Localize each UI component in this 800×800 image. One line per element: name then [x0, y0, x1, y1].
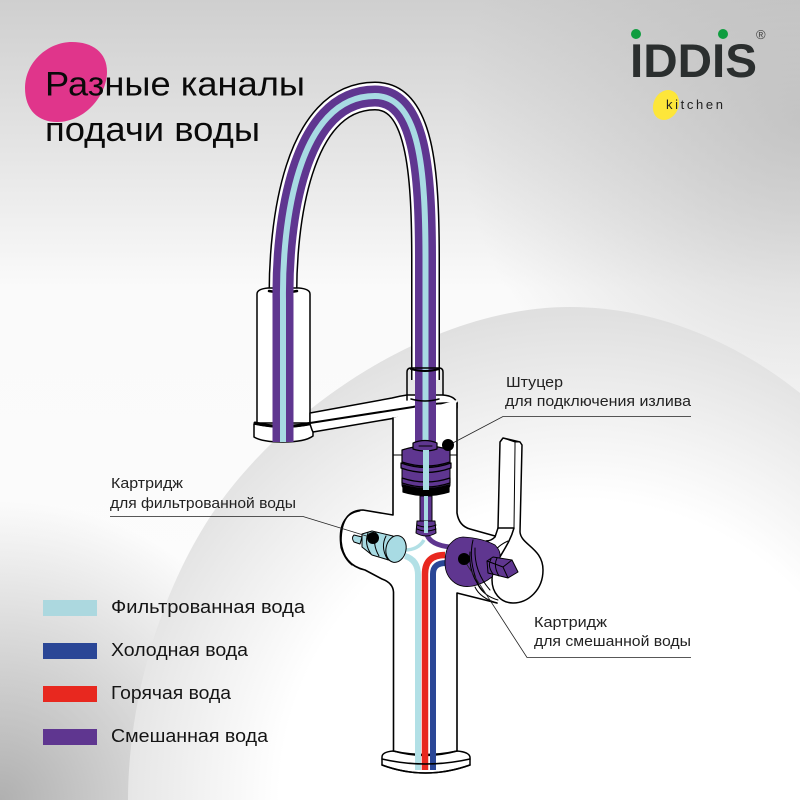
registered mark: ® [756, 27, 766, 42]
marker dot [442, 439, 454, 451]
connector fitting [401, 440, 451, 496]
callout text [505, 374, 692, 410]
lever handle [475, 438, 543, 603]
callout text: для фильтрованной воды [110, 495, 296, 512]
logo wordmark: IDDIS [630, 34, 757, 87]
title line 1: Разные каналы [45, 66, 305, 104]
filtered water cartridge [352, 531, 409, 564]
callout text [534, 614, 691, 650]
water channel: filtered in body [405, 556, 418, 770]
marker dot [458, 553, 470, 565]
spout collar [407, 368, 443, 401]
title [25, 42, 305, 149]
water channel: mixed in spout [283, 96, 426, 445]
logo green dots [631, 29, 728, 39]
callout text: Картридж [111, 475, 183, 492]
leader line [110, 516, 373, 538]
water channel: mixed link [427, 535, 450, 547]
water channel: cold [433, 563, 446, 770]
mixed water cartridge [445, 537, 518, 592]
callout text: для смешанной воды [534, 633, 691, 650]
callout: mixed cartridge [458, 553, 691, 658]
legend: mixed: Смешанная вода [111, 725, 269, 746]
leader line [464, 560, 691, 658]
marker dot [367, 532, 379, 544]
callout: filtered cartridge [110, 475, 379, 544]
pink blob behind title [25, 42, 107, 122]
base [382, 751, 470, 773]
legend: cold: Холодная вода [111, 639, 249, 660]
connector stem [416, 496, 436, 536]
water channel: hot [425, 555, 445, 770]
legend [43, 596, 306, 746]
pull-out head [254, 288, 313, 442]
legend: cold [43, 639, 249, 660]
legend: hot: Горячая вода [111, 682, 232, 703]
callout text: Картридж [534, 614, 607, 631]
yellow blob [648, 86, 684, 124]
legend: filtered: Фильтрованная вода [111, 596, 306, 617]
logo [630, 27, 766, 124]
callout text: Штуцер [506, 374, 563, 391]
callout text [110, 475, 296, 512]
swing arm [310, 395, 457, 432]
faucet [254, 96, 543, 773]
callout text: для подключения излива [505, 393, 692, 410]
legend: filtered [43, 596, 306, 617]
title line 2: подачи воды [45, 111, 260, 149]
legend: hot [43, 682, 232, 703]
kitchen label: kitchen [666, 97, 723, 112]
faucet body [341, 400, 520, 752]
leader line [449, 416, 691, 445]
spout outline [283, 96, 426, 380]
base front lines over channels [382, 759, 470, 773]
legend: mixed [43, 725, 269, 746]
callout: fitting [442, 374, 692, 451]
water channel: filtered in spout [283, 96, 426, 445]
